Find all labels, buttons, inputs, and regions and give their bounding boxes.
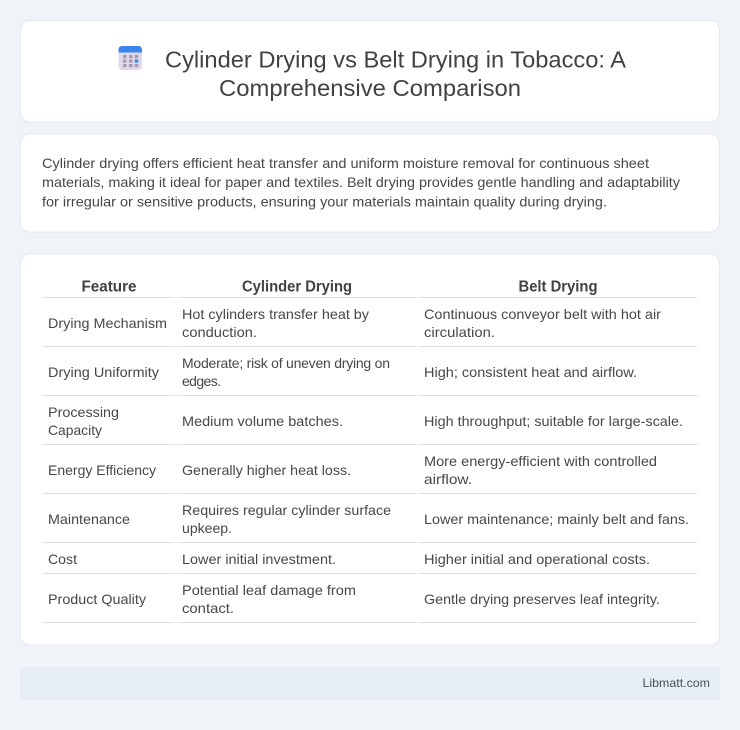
row: maintenance: Requires regular cylinder surface [182,502,391,518]
row: maintenance: Maintenance [48,511,130,527]
panel: intro text: Cylinder drying offers efficient heat transfer and uniform moisture removal for continuous sheet [42,155,649,171]
row: drying uniformity: Drying Uniformity [48,364,159,380]
row: processing capacity: Processing [48,404,119,420]
row: energy efficiency: Generally higher heat loss. [182,462,351,478]
row: energy efficiency: More energy-efficient with controlled [424,453,657,469]
row: processing capacity [48,404,683,438]
row: product quality [48,582,660,616]
row: drying mechanism: circulation. [424,324,495,340]
row: drying uniformity: High; consistent heat and airflow. [424,364,637,380]
panel: comparison table [20,254,720,645]
row: drying uniformity: Moderate; risk of uneven drying on [182,355,390,371]
table header: Cylinder Drying [242,278,352,296]
panel: intro text [20,134,720,232]
row: product quality: Potential leaf damage from [182,582,356,598]
row: cost [48,551,650,567]
row: energy efficiency: airflow. [424,471,472,487]
row: maintenance: upkeep. [182,520,232,536]
row: product quality: Product Quality [48,591,146,607]
table header: Feature [82,278,137,296]
row: drying mechanism [48,306,661,340]
panel: intro text: materials, making it ideal for paper and textiles. Belt drying provides gentle handling and adaptability [42,174,680,190]
row: product quality: Gentle drying preserves leaf integrity. [424,591,660,607]
row: drying mechanism: Hot cylinders transfer heat by [182,306,369,322]
panel: title card [20,20,720,122]
row: drying mechanism: Drying Mechanism [48,315,167,331]
footer: Libmatt.com [642,676,710,690]
row: energy efficiency [48,453,657,487]
row: processing capacity: Medium volume batches. [182,413,343,429]
row: energy efficiency: Energy Efficiency [48,462,156,478]
title: Comprehensive Comparison [219,75,521,101]
row: maintenance [48,502,689,536]
row: processing capacity: High throughput; suitable for large-scale. [424,413,683,429]
row: processing capacity: Capacity [48,422,102,438]
row: maintenance: Lower maintenance; mainly belt and fans. [424,511,689,527]
row: cost: Lower initial investment. [182,551,336,567]
panel: intro text: for irregular or sensitive products, ensuring your materials maintain quality during drying. [42,194,607,210]
title [165,46,626,101]
table header [82,278,598,296]
row: drying uniformity: edges. [182,373,221,389]
row: drying mechanism: Continuous conveyor belt with hot air [424,306,661,322]
title: Cylinder Drying vs Belt Drying in Tobacco: A [165,46,626,72]
row: drying uniformity [48,355,637,389]
table header: Belt Drying [518,278,598,296]
row: cost: Cost [48,551,77,567]
footer [20,667,720,700]
row: product quality: contact. [182,600,234,616]
icon: calendar [118,46,142,70]
row: cost: Higher initial and operational costs. [424,551,650,567]
row: drying mechanism: conduction. [182,324,257,340]
